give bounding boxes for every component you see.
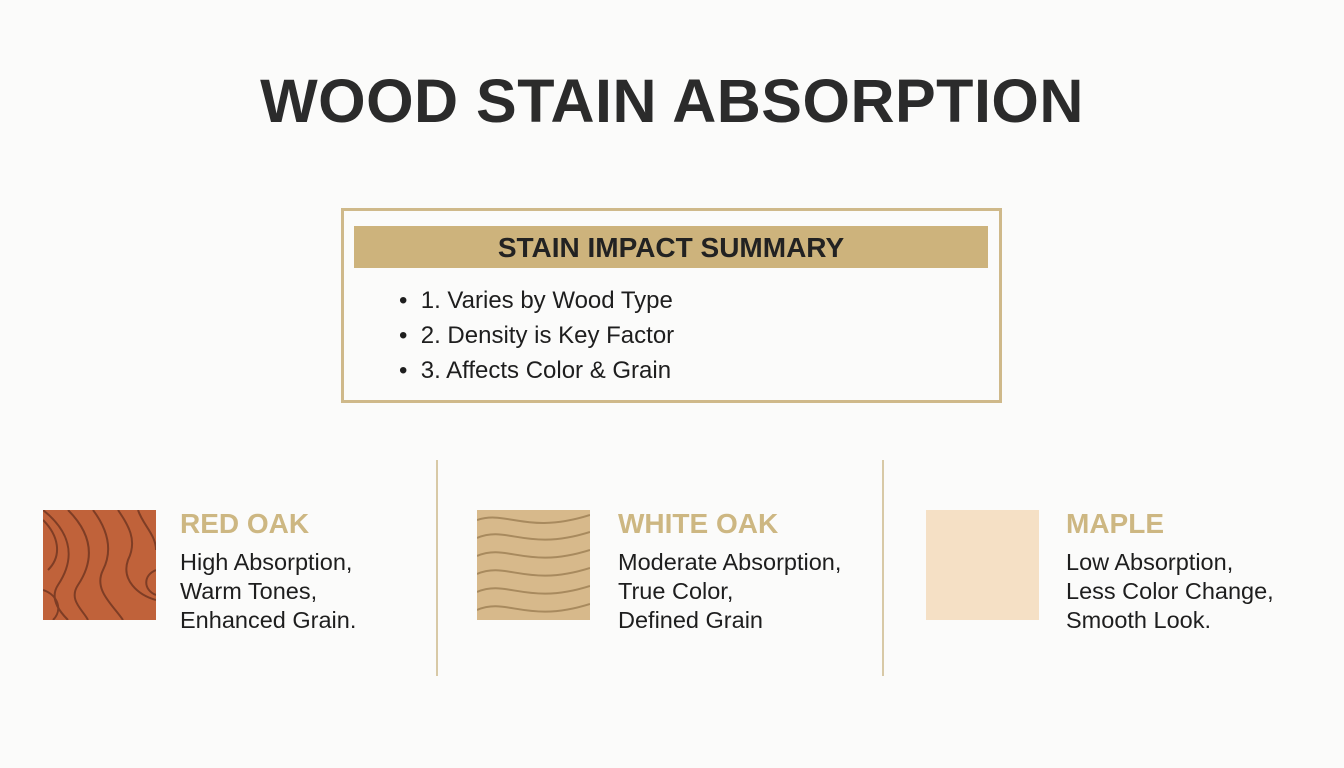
panel: stain impact summary [341,208,1002,403]
summary heading bar: STAIN IMPACT SUMMARY [498,232,844,263]
icon: white oak swatch [477,510,590,620]
summary heading bar [354,226,988,268]
icon: red oak swatch [43,510,156,620]
text: maple: Smooth Look. [1066,607,1211,633]
summary list: • 1. Varies by Wood Type [399,287,673,314]
text: maple [1066,508,1274,633]
text: white oak: Defined Grain [618,607,763,633]
text: red oak: High Absorption, [180,549,352,575]
text: maple: Low Absorption, [1066,549,1233,575]
icon: maple swatch [926,510,1039,620]
text: white oak: Moderate Absorption, [618,549,841,575]
text: white oak: WHITE OAK [618,508,778,539]
text: white oak [618,508,841,633]
text: maple: Less Color Change, [1066,578,1274,604]
divider [436,460,438,676]
text: red oak [180,508,356,633]
text: white oak: True Color, [618,578,733,604]
text: red oak: Warm Tones, [180,578,317,604]
summary list [399,287,674,384]
title: WOOD STAIN ABSORPTION [260,67,1084,135]
summary list: • 3. Affects Color & Grain [399,357,671,384]
text: maple: MAPLE [1066,508,1164,539]
summary list: • 2. Density is Key Factor [399,322,674,349]
text: red oak: Enhanced Grain. [180,607,356,633]
text: red oak: RED OAK [180,508,309,539]
